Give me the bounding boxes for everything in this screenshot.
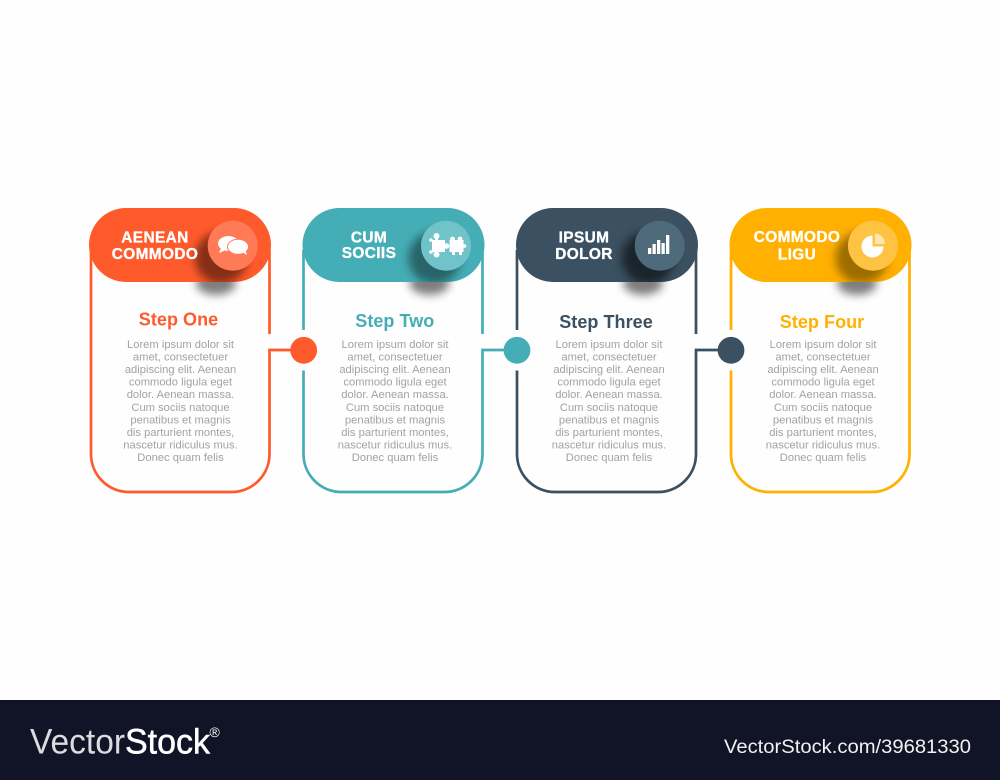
body text: step four: dis parturient montes, xyxy=(769,427,877,439)
body text: step three: Lorem ipsum dolor sit xyxy=(556,339,663,351)
body text: step four: Donec quam felis xyxy=(780,452,867,464)
body text: step two: amet, consectetuer xyxy=(347,352,443,364)
body text: step four: Cum sociis natoque xyxy=(774,402,872,414)
header label: step three: DOLOR xyxy=(555,246,613,263)
shadow below header: step one xyxy=(196,271,236,295)
icon shadow: step two xyxy=(408,232,460,284)
footer bar xyxy=(0,700,1000,780)
body text: step two: dis parturient montes, xyxy=(341,427,449,439)
panel: step three xyxy=(516,208,731,492)
header label: step two: SOCIIS xyxy=(342,245,396,262)
header pill: step two xyxy=(302,208,484,282)
body text: step two: commodo ligula eget xyxy=(343,377,448,389)
header label: step one: AENEAN xyxy=(121,230,189,246)
body text: step two: Cum sociis natoque xyxy=(346,402,444,414)
header pill: step four xyxy=(730,208,912,282)
body text: step one: adipiscing elit. Aenean xyxy=(125,364,236,376)
header pill: step three xyxy=(516,208,698,282)
body text: step three: nascetur ridiculus mus. xyxy=(552,439,666,451)
card outline and connector: step two xyxy=(304,250,517,492)
card outline and connector: step three xyxy=(517,250,731,492)
step heading: step two: Step Two xyxy=(355,311,434,331)
header label: step one: COMMODO xyxy=(112,246,198,263)
icon: bar chart xyxy=(635,221,685,271)
footer logo: Stock xyxy=(125,722,210,762)
step heading: step three: Step Three xyxy=(559,312,653,332)
body text: step three: penatibus et magnis xyxy=(559,414,659,426)
connector dot: three to four xyxy=(718,337,744,364)
body text: step one: amet, consectetuer xyxy=(133,352,228,364)
body text: step one: Cum sociis natoque xyxy=(131,402,230,414)
body text: step three: dolor. Aenean massa. xyxy=(555,389,663,401)
step heading: step one: Step One xyxy=(139,310,218,330)
shadow below header: step two xyxy=(410,271,450,295)
body text: step three: Donec quam felis xyxy=(566,452,653,464)
body text: step two: Donec quam felis xyxy=(352,452,439,464)
icon shadow: step four xyxy=(836,232,888,284)
panel: step two xyxy=(302,208,517,492)
icon shadow: step one xyxy=(195,232,247,284)
body text: step four: adipiscing elit. Aenean xyxy=(767,364,879,376)
body text: step four: dolor. Aenean massa. xyxy=(769,389,877,401)
panel: step one xyxy=(89,208,303,492)
card outline and connector: step one xyxy=(91,250,303,492)
body text: step four: commodo ligula eget xyxy=(771,377,876,389)
body text: step three: Cum sociis natoque xyxy=(560,402,658,414)
panel: step four xyxy=(730,208,912,492)
footer logo: ® xyxy=(210,724,220,740)
header label: step four: COMMODO xyxy=(754,229,840,246)
body text: step three: commodo ligula eget xyxy=(557,377,662,389)
shadow below header: step three xyxy=(623,271,663,295)
body text: step two: penatibus et magnis xyxy=(345,414,445,426)
body text: step one: penatibus et magnis xyxy=(130,414,231,426)
body text: step three: adipiscing elit. Aenean xyxy=(553,364,665,376)
connector dot: one to two xyxy=(290,337,317,364)
body text: step one: commodo ligula eget xyxy=(129,377,233,389)
header label: step four: LIGU xyxy=(778,246,816,264)
card outline: step four xyxy=(731,250,910,492)
header label: step three: IPSUM xyxy=(559,230,609,246)
icon: chat bubbles xyxy=(208,221,258,271)
body text: step two: nascetur ridiculus mus. xyxy=(338,439,452,451)
body text: step one: nascetur ridiculus mus. xyxy=(123,439,238,451)
infographic canvas xyxy=(0,208,1000,780)
icon shadow: step three xyxy=(622,232,674,284)
footer logo: Vector xyxy=(30,722,125,762)
body text: step three: amet, consectetuer xyxy=(561,352,657,364)
step heading: step four: Step Four xyxy=(780,312,864,332)
body text: step three: dis parturient montes, xyxy=(555,427,663,439)
body text: step four: amet, consectetuer xyxy=(775,352,871,364)
icon: pie chart xyxy=(848,221,898,271)
body text: step one: Donec quam felis xyxy=(137,452,224,464)
connector dot: two to three xyxy=(504,337,530,364)
body text: step one: dolor. Aenean massa. xyxy=(127,389,234,401)
body text: step four: nascetur ridiculus mus. xyxy=(766,439,880,451)
footer logo xyxy=(30,722,220,762)
icon: puzzle pieces xyxy=(421,221,471,271)
header pill: step one xyxy=(89,208,271,282)
body text: step two: dolor. Aenean massa. xyxy=(341,389,449,401)
body text: step four: penatibus et magnis xyxy=(773,414,873,426)
shadow below header: step four xyxy=(837,271,877,295)
body text: step two: adipiscing elit. Aenean xyxy=(339,364,451,376)
header label: step two: CUM xyxy=(351,230,387,246)
body text: step one: dis parturient montes, xyxy=(127,427,234,439)
body text: step four: Lorem ipsum dolor sit xyxy=(770,339,877,351)
footer image id: VectorStock.com/39681330 xyxy=(724,736,971,758)
body text: step two: Lorem ipsum dolor sit xyxy=(342,339,449,351)
body text: step one: Lorem ipsum dolor sit xyxy=(127,339,235,351)
